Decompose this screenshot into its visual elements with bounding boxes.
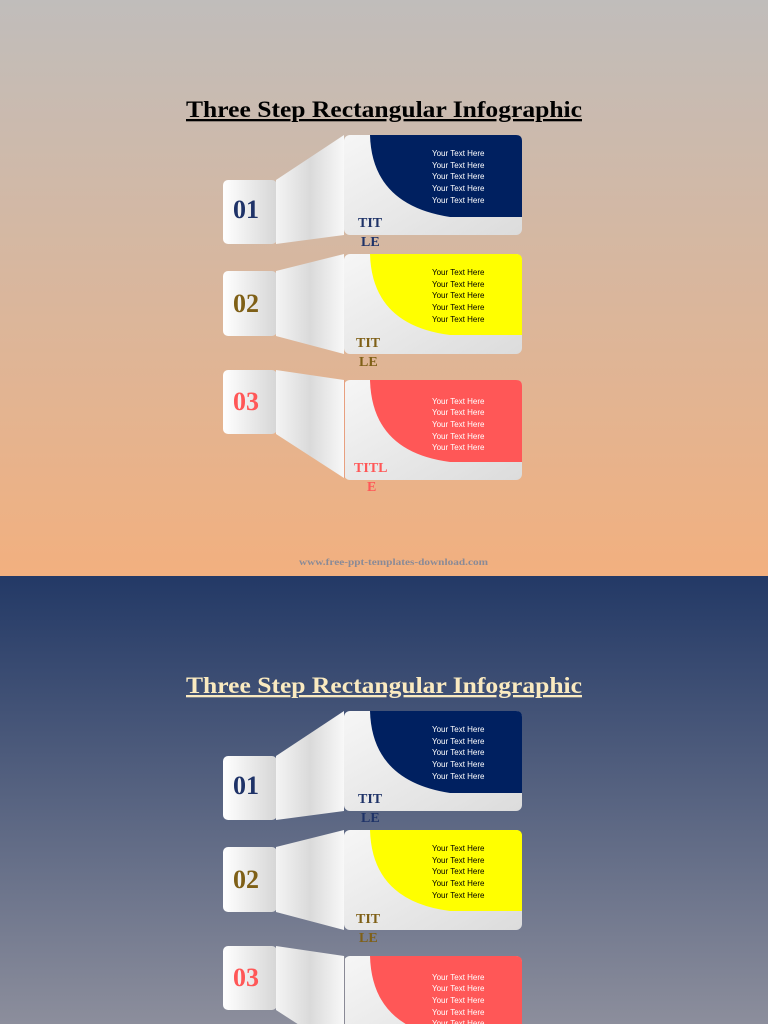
step 01: Your Text Here (432, 772, 485, 781)
step 03: Your Text Here (432, 1008, 485, 1017)
step 01: Your Text Here (432, 172, 485, 181)
step 01: Your Text Here (432, 725, 485, 734)
step 01: TIT (358, 216, 383, 231)
step 01: Your Text Here (432, 760, 485, 769)
step 02: Your Text Here (432, 315, 485, 324)
step 02: LE (359, 931, 378, 946)
step 01: Your Text Here (432, 737, 485, 746)
step 01: LE (361, 235, 380, 250)
step 02: 02 (233, 289, 259, 318)
step 02: Your Text Here (432, 280, 485, 289)
step 03: 03 (233, 387, 259, 416)
step 03 (223, 946, 522, 1024)
step 03: TITL (354, 461, 387, 476)
step 02 (223, 254, 522, 370)
step 02: Your Text Here (432, 303, 485, 312)
step 01: Your Text Here (432, 149, 485, 158)
step 03: E (367, 480, 376, 495)
step 03: Your Text Here (432, 984, 485, 993)
step 01: LE (361, 811, 380, 826)
step 01: Your Text Here (432, 161, 485, 170)
step 02: Your Text Here (432, 856, 485, 865)
step 01: Your Text Here (432, 184, 485, 193)
step 02: Your Text Here (432, 891, 485, 900)
step 02: TIT (356, 336, 381, 351)
step 02: Your Text Here (432, 867, 485, 876)
step 01 (223, 135, 522, 250)
step 02 (223, 830, 522, 946)
step 02: Your Text Here (432, 291, 485, 300)
background: slide 1 (0, 0, 768, 576)
step 01 (223, 711, 522, 826)
step 02: TIT (356, 912, 381, 927)
step 01: Your Text Here (432, 748, 485, 757)
step 03: Your Text Here (432, 397, 485, 406)
step 01: 01 (233, 771, 259, 800)
slide 1 (186, 97, 582, 567)
title: Three Step Rectangular Infographic (186, 97, 582, 122)
step 03 (223, 370, 522, 495)
step 03: Your Text Here (432, 443, 485, 452)
title: Three Step Rectangular Infographic (186, 673, 582, 698)
step 02: Your Text Here (432, 879, 485, 888)
slide 2 (186, 673, 582, 1024)
step 02: LE (359, 355, 378, 370)
step 01: 01 (233, 195, 259, 224)
step 02: 02 (233, 865, 259, 894)
step 03: Your Text Here (432, 420, 485, 429)
background: slide 2 (0, 576, 768, 1024)
step 03: Your Text Here (432, 408, 485, 417)
step 01: Your Text Here (432, 196, 485, 205)
step 03: Your Text Here (432, 432, 485, 441)
step 02: Your Text Here (432, 844, 485, 853)
footer url: www.free-ppt-templates-download.com (299, 557, 489, 567)
step 02: Your Text Here (432, 268, 485, 277)
step 03: 03 (233, 963, 259, 992)
step 03: Your Text Here (432, 996, 485, 1005)
step 01: TIT (358, 792, 383, 807)
step 03: Your Text Here (432, 973, 485, 982)
